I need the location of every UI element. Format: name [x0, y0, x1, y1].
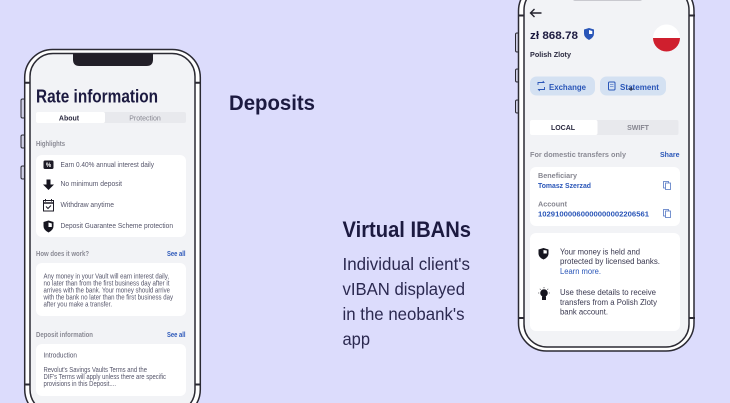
button: statement	[600, 76, 666, 96]
icon: percent	[44, 160, 54, 169]
link: see all: See all	[167, 251, 186, 258]
panel: account details: Beneficiary	[538, 171, 578, 180]
panel: notes	[530, 233, 680, 331]
link: share: Share	[660, 150, 680, 159]
button: exchange: Exchange	[549, 83, 587, 92]
icon: percent: %	[46, 163, 52, 169]
panel: deposit information: Introduction	[44, 352, 77, 360]
highlight: guarantee: Deposit Guarantee Scheme protection	[60, 223, 173, 230]
icon: copy beneficiary	[664, 182, 670, 190]
panel: notes: transfers from a Polish Zloty	[560, 298, 657, 307]
tabs: about / protection: About	[59, 116, 80, 122]
description	[342, 254, 470, 349]
button: exchange	[530, 76, 595, 96]
label: domestic transfers: For domestic transfers only	[530, 150, 627, 159]
highlight: withdraw: Withdraw anytime	[60, 202, 114, 209]
link: see all: See all	[167, 332, 186, 339]
heading: virtual IBANs: Virtual IBANs	[342, 217, 471, 242]
panel: how it works: with the bank no later than the first business day	[43, 294, 173, 302]
tabs: local / swift: LOCAL	[551, 125, 576, 132]
icon: light bulb	[538, 287, 550, 300]
icon: back arrow	[530, 9, 542, 17]
panel: how it works: arrives with the bank. Your money should arrive	[44, 288, 170, 294]
tabs: local / swift	[530, 120, 678, 135]
heading: rate information: Rate information	[36, 86, 158, 106]
currency name: Polish Zloty	[530, 50, 572, 59]
description: in the neobank's	[342, 304, 465, 324]
panel: notes: Your money is held and	[560, 248, 640, 256]
left phone: rate information	[21, 50, 201, 403]
panel: deposit information: provisions in this Deposit....	[44, 381, 116, 388]
panel: highlights	[36, 155, 186, 237]
panel: how it works	[36, 263, 186, 316]
description: Individual client's	[342, 254, 470, 274]
panel: account details: Account	[538, 200, 567, 208]
icon: copy account	[664, 210, 670, 218]
text block: virtual IBANs	[342, 217, 471, 349]
heading: how does it work: How does it work?	[36, 251, 89, 258]
panel: notes: protected by licensed banks.	[560, 257, 660, 266]
panel: deposit information	[36, 344, 186, 396]
highlight: minimum deposit: No minimum deposit	[60, 181, 122, 188]
button: statement: Statement	[620, 83, 659, 92]
panel: account details	[530, 167, 680, 226]
panel: how it works: no later than from the first business day after it	[44, 280, 170, 288]
tabs: about / protection	[36, 112, 186, 123]
panel: account details: Tomasz Szerzad	[538, 181, 591, 190]
panel: notes: Learn more.	[560, 267, 601, 276]
panel: notes: bank account.	[560, 308, 608, 316]
right phone: virtual IBAN screen	[516, 0, 695, 351]
panel: notes: Use these details to receive	[560, 288, 657, 297]
phone frame	[516, 0, 695, 351]
panel: account details: 10291000060000000002206561	[538, 210, 649, 218]
tabs: about / protection: Protection	[129, 116, 161, 122]
heading: deposits: Deposits	[229, 92, 315, 115]
panel: deposit information: Revolut's Savings Vaults Terms and the	[44, 367, 147, 374]
panel: how it works: Any money in your Vault will earn interest daily,	[44, 274, 169, 280]
panel: deposit information: DIF's Terms will apply unless there are specific	[44, 374, 166, 381]
balance: zł 868.78	[530, 30, 578, 42]
panel: how it works: after you make a transfer.	[44, 302, 112, 308]
highlight: interest: Earn 0.40% annual interest daily	[60, 162, 154, 169]
phone frame	[21, 50, 201, 403]
heading: deposit information: Deposit information	[36, 332, 93, 339]
icon: Polish flag	[653, 24, 680, 52]
description: app	[342, 329, 370, 349]
icon: calendar	[44, 199, 54, 211]
icon: shield	[44, 220, 54, 232]
icon: shield	[538, 248, 548, 260]
icon: blue shield	[584, 28, 594, 40]
tabs: local / swift: SWIFT	[627, 125, 650, 132]
icon: down arrow	[43, 180, 54, 190]
description: vIBAN displayed	[342, 279, 465, 299]
heading: highlights: Highlights	[36, 141, 65, 148]
